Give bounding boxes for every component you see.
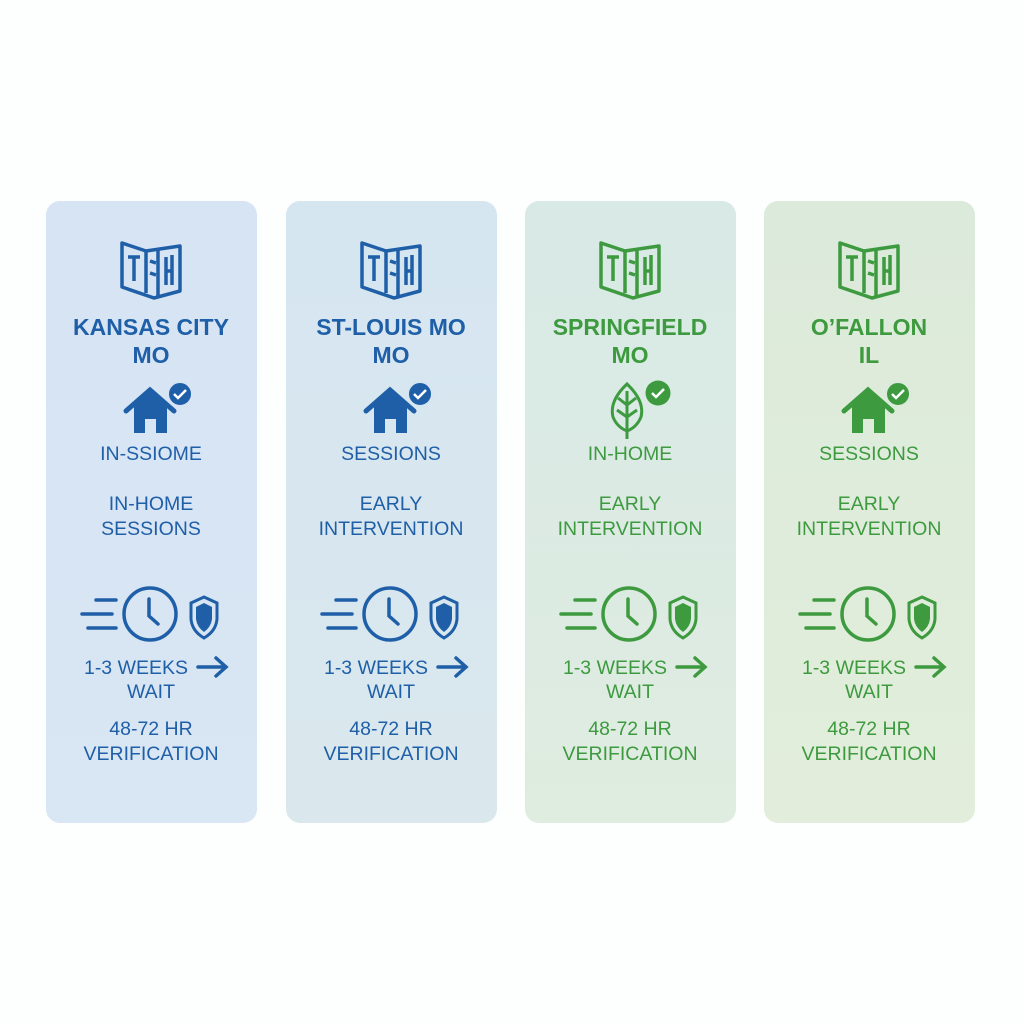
title: KANSAS CITY bbox=[73, 314, 229, 340]
label: SESSIONS bbox=[819, 443, 919, 465]
wait text: 1-3 WEEKS bbox=[563, 657, 667, 679]
icon: clock and shield bbox=[561, 588, 696, 640]
icon: clock and shield bbox=[82, 588, 217, 640]
title bbox=[553, 314, 707, 368]
panel: St-Louis MO bbox=[286, 201, 497, 823]
wait text bbox=[83, 657, 226, 765]
icon: clock and shield bbox=[800, 588, 935, 640]
icon: leaf with check bbox=[612, 380, 670, 439]
title: MO bbox=[132, 342, 170, 368]
title: SPRINGFIELD bbox=[553, 314, 707, 340]
wait text: VERIFICATION bbox=[801, 743, 937, 765]
label: IN-HOME bbox=[109, 493, 193, 515]
wait text bbox=[562, 657, 705, 765]
panel: Springfield MO bbox=[525, 201, 736, 823]
wait text: VERIFICATION bbox=[83, 743, 219, 765]
wait text bbox=[323, 657, 466, 765]
icon: clock and shield bbox=[322, 588, 457, 640]
label: SESSIONS bbox=[341, 443, 441, 465]
wait text bbox=[801, 657, 944, 765]
title bbox=[811, 314, 927, 368]
icon: map bbox=[601, 243, 659, 298]
label: EARLY bbox=[838, 493, 900, 515]
label: IN-SSIOME bbox=[100, 443, 202, 465]
wait text: 48-72 HR bbox=[827, 718, 911, 740]
panel: O'Fallon IL bbox=[764, 201, 975, 823]
icon: home with check bbox=[126, 382, 192, 433]
wait text: WAIT bbox=[127, 681, 175, 703]
wait text: WAIT bbox=[845, 681, 893, 703]
icon: map bbox=[362, 243, 420, 298]
title bbox=[73, 314, 229, 368]
title bbox=[316, 314, 466, 368]
wait text: 1-3 WEEKS bbox=[324, 657, 428, 679]
title: O’FALLON bbox=[811, 314, 927, 340]
wait text: 48-72 HR bbox=[588, 718, 672, 740]
icon: map bbox=[840, 243, 898, 298]
label bbox=[319, 443, 463, 540]
wait text: WAIT bbox=[606, 681, 654, 703]
title: MO bbox=[611, 342, 649, 368]
label: INTERVENTION bbox=[797, 518, 941, 540]
wait text: VERIFICATION bbox=[323, 743, 459, 765]
label: EARLY bbox=[599, 493, 661, 515]
wait text: 48-72 HR bbox=[349, 718, 433, 740]
label: INTERVENTION bbox=[558, 518, 702, 540]
label bbox=[797, 443, 941, 540]
label: IN-HOME bbox=[588, 443, 672, 465]
wait text: WAIT bbox=[367, 681, 415, 703]
label: EARLY bbox=[360, 493, 422, 515]
label bbox=[558, 443, 702, 540]
wait text: 1-3 WEEKS bbox=[84, 657, 188, 679]
wait text: VERIFICATION bbox=[562, 743, 698, 765]
icon: home with check bbox=[844, 382, 910, 433]
title: IL bbox=[859, 342, 879, 368]
title: ST-LOUIS MO bbox=[316, 314, 466, 340]
label bbox=[100, 443, 202, 540]
title: MO bbox=[372, 342, 410, 368]
icon: home with check bbox=[366, 382, 432, 433]
panel: Kansas City MO bbox=[46, 201, 257, 823]
wait text: 48-72 HR bbox=[109, 718, 193, 740]
icon: map bbox=[122, 243, 180, 298]
label: INTERVENTION bbox=[319, 518, 463, 540]
label: SESSIONS bbox=[101, 518, 201, 540]
wait text: 1-3 WEEKS bbox=[802, 657, 906, 679]
